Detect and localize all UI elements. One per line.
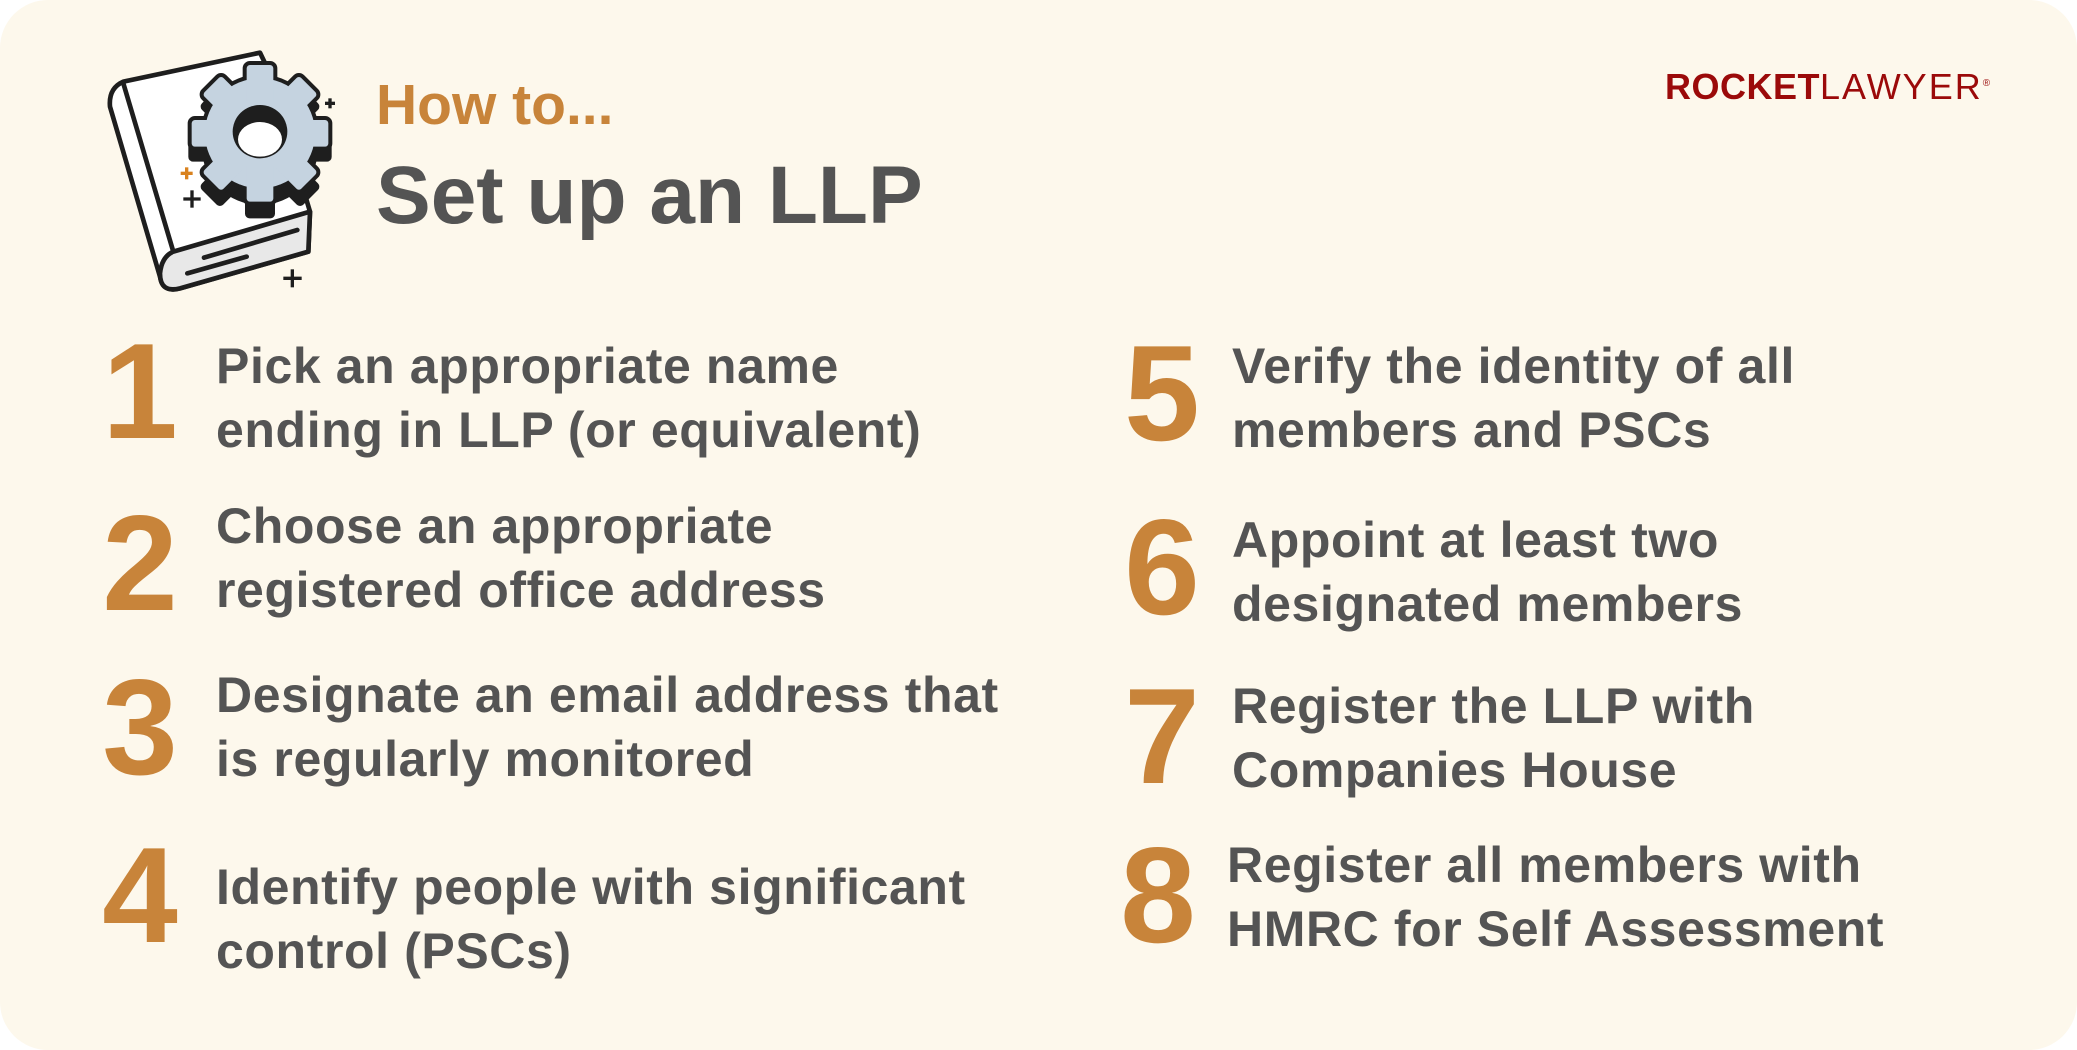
step 8 (1120, 819, 1884, 971)
step 3: is regularly monitored (216, 731, 754, 787)
step 3: 3 (102, 651, 178, 803)
step 2: 2 (102, 487, 178, 639)
step 6: 6 (1124, 491, 1200, 643)
step 2: registered office address (216, 562, 826, 618)
subtitle: How to... (376, 73, 613, 137)
step 8: 8 (1120, 819, 1196, 971)
title: Set up an LLP (376, 150, 923, 241)
step 7: 7 (1124, 660, 1200, 812)
step 5: 5 (1124, 317, 1200, 469)
step 5: members and PSCs (1232, 402, 1711, 458)
step 1: 1 (102, 315, 178, 467)
step 6: designated members (1232, 576, 1743, 632)
step 5: Verify the identity of all (1232, 338, 1795, 394)
step 7: Companies House (1232, 742, 1677, 798)
step 1: Pick an appropriate name (216, 338, 839, 394)
step 4: control (PSCs) (216, 923, 572, 979)
step 3: Designate an email address that (216, 667, 999, 723)
logo: ROCKETLAWYER® (1665, 66, 1990, 107)
icon: book with gear (108, 50, 335, 292)
step 4 (102, 819, 966, 979)
step 8: Register all members with (1227, 837, 1862, 893)
step 7 (1124, 660, 1755, 812)
step 4: 4 (102, 819, 178, 971)
step 7: Register the LLP with (1232, 678, 1755, 734)
step 6 (1124, 491, 1743, 643)
step 1: ending in LLP (or equivalent) (216, 402, 921, 458)
step 4: Identify people with significant (216, 859, 966, 915)
step 2 (102, 487, 826, 639)
step 3 (102, 651, 999, 803)
step 6: Appoint at least two (1232, 512, 1719, 568)
step 1 (102, 315, 921, 467)
step 8: HMRC for Self Assessment (1227, 901, 1884, 957)
step 5 (1124, 317, 1795, 469)
step 2: Choose an appropriate (216, 498, 773, 554)
